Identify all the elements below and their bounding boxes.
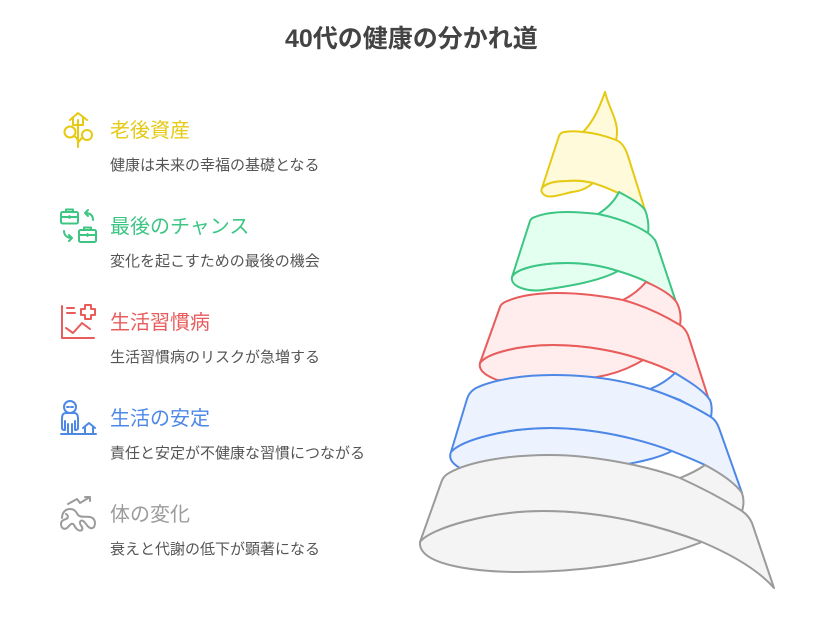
description: 体の変化: 衰えと代謝の低下が顕著になる [110, 541, 320, 558]
description: 生活習慣病: 生活習慣病のリスクが急増する [110, 349, 320, 366]
icon: squiggle and rising arrow [61, 497, 95, 531]
diagram: spiral cone [420, 92, 774, 588]
heading: 生活の安定: 生活の安定 [110, 408, 210, 430]
icon: person and house [61, 401, 96, 434]
item: 体の変化 [110, 504, 320, 558]
description: 老後資産: 健康は未来の幸福の基礎となる [110, 157, 320, 174]
icon: briefcases swap [61, 210, 96, 242]
heading: 体の変化: 体の変化 [110, 504, 190, 526]
description: 生活の安定: 責任と安定が不健康な習慣につながる [110, 445, 365, 462]
title: 40代の健康の分かれ道 [285, 25, 538, 53]
item: 老後資産 [110, 120, 320, 174]
item: 生活の安定 [110, 408, 365, 462]
heading: 最後のチャンス: 最後のチャンス [110, 216, 249, 238]
heading: 生活習慣病: 生活習慣病 [110, 312, 210, 334]
icon: home and growth [64, 113, 92, 147]
layer: gray [420, 455, 774, 588]
layer: blue [450, 373, 742, 493]
description: 最後のチャンス: 変化を起こすための最後の機会 [110, 253, 320, 270]
layer: green [512, 192, 677, 305]
icon: chart with medical cross [62, 305, 95, 338]
item: 最後のチャンス [110, 216, 320, 270]
heading: 老後資産: 老後資産 [110, 120, 190, 142]
layer: red [480, 282, 709, 400]
item: 生活習慣病 [110, 312, 320, 366]
layer: yellow [541, 92, 645, 210]
